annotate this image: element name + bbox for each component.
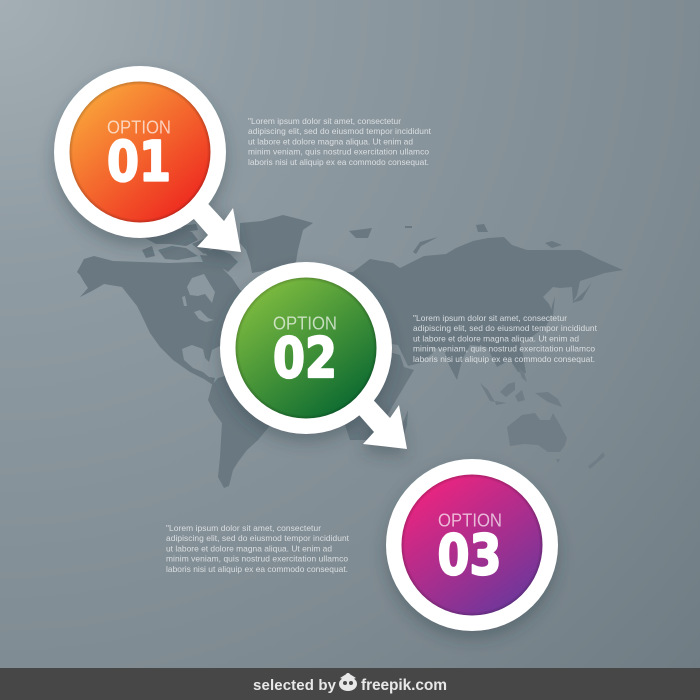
ring 2 [220,262,392,434]
map: Japan and Sakhalin [550,282,592,316]
number 2: 02 [273,326,337,390]
text block 3 [166,523,350,574]
map: Australia [507,413,567,452]
label 2: OPTION [273,314,337,334]
map: Greenland [240,215,313,273]
text block 3: minim veniam, quis nostrud exercitation ullamco [166,554,348,564]
text block 3: ut labore et dolore magna aliqua. Ut enim ad [166,544,332,554]
text block 2: adipiscing elit, sed do eiusmod tempor incididunt [413,323,598,333]
text block 1: laboris nisi ut aliquip ex ea commodo consequat. [248,157,429,167]
text block 1: minim veniam, quis nostrud exercitation ullamco [248,146,429,156]
map: Madagascar [401,410,408,440]
map: Southeast Asia and Oceania [480,367,605,469]
text block 1: "Lorem ipsum dolor sit amet, consectetur [248,116,401,126]
map: Novaya Zemlya and Arctic islands [405,224,562,254]
text block 3: "Lorem ipsum dolor sit amet, consectetur [166,523,321,533]
arrow 1 [186,195,241,252]
shadow: option 2 [220,270,407,457]
label 1: OPTION [107,118,171,138]
shadow: option 1 [54,74,241,260]
map: Southeast Asia islands [480,367,562,407]
text block 2: minim veniam, quis nostrud exercitation ullamco [413,344,595,354]
footer bar [0,668,700,700]
option 1 badge [54,66,241,252]
text block 1: adipiscing elit, sed do eiusmod tempor incididunt [248,126,432,136]
text block 3: adipiscing elit, sed do eiusmod tempor incididunt [166,533,350,543]
option 3 badge [386,459,558,631]
map: Eurasia [340,237,623,380]
icon: freepik mascot [339,673,357,691]
ring 1 [54,66,226,238]
arrow 2 [352,392,407,449]
shadow: option 3 [386,467,558,639]
text block 1: ut labore et dolore magna aliqua. Ut enim ad [248,136,413,146]
map: New Zealand and Tasmania [556,452,605,469]
disc 2 [236,278,376,418]
text block 3: laboris nisi ut aliquip ex ea commodo consequat. [166,564,348,574]
footer: freepik.com: freepik.com [361,677,447,694]
map: South America [208,374,285,488]
text block 2: "Lorem ipsum dolor sit amet, consectetur [413,313,567,323]
text block 2 [413,313,598,364]
text block 1 [248,116,432,167]
world map [77,215,623,488]
map: North America [77,255,252,385]
ring 3 [386,459,558,631]
text block 2: ut labore et dolore magna aliqua. Ut enim ad [413,334,579,344]
map: Canadian Arctic islands [142,224,238,272]
disc 1 [70,82,210,222]
number 3: 03 [438,523,502,587]
label 3: OPTION [438,510,502,530]
map: Iceland and Svalbard [349,228,372,238]
map: Africa [340,340,414,440]
number 1: 01 [107,130,171,194]
disc 3 [402,474,542,616]
text block 2: laboris nisi ut aliquip ex ea commodo consequat. [413,354,595,364]
footer: selected by: selected by [253,677,337,694]
option 2 badge [220,262,407,449]
